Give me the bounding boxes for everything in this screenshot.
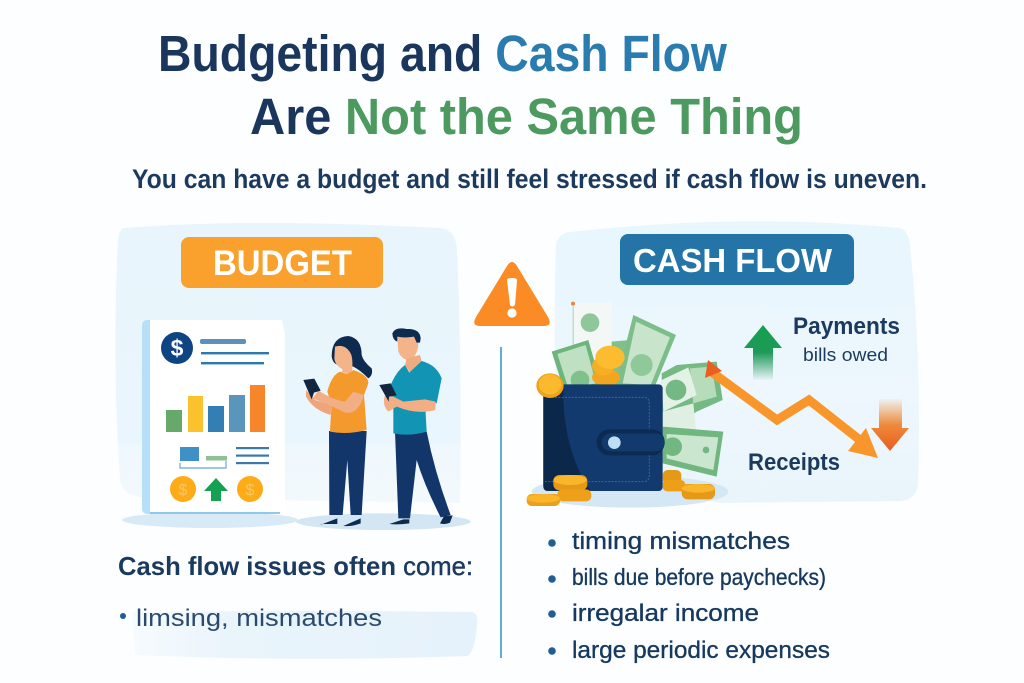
payments label: Payments bbox=[793, 313, 900, 340]
icon: coin bbox=[170, 476, 196, 502]
cash flow badge bbox=[620, 234, 854, 285]
icon: orange down arrow bbox=[871, 399, 909, 451]
title bbox=[158, 25, 803, 145]
panel background bbox=[555, 221, 919, 503]
receipts label: Receipts bbox=[748, 449, 840, 476]
bullet item: irregalar income bbox=[572, 600, 759, 627]
cash flow badge: CASH FLOW bbox=[633, 242, 833, 279]
coin bbox=[536, 373, 564, 398]
icon: dollar circle: $ bbox=[171, 335, 184, 361]
wallet bbox=[543, 384, 665, 491]
list: cash flow causes bbox=[548, 528, 830, 664]
man bbox=[379, 328, 453, 524]
illustration: two people with phones bbox=[296, 328, 471, 530]
text block: cash flow issues bbox=[118, 551, 477, 659]
title: Are Not the Same Thing bbox=[250, 88, 803, 145]
icon: coin: $ bbox=[179, 482, 188, 499]
icon: green up arrow bbox=[744, 325, 782, 380]
bar chart bbox=[166, 385, 265, 432]
coins in wallet bbox=[592, 346, 625, 386]
panel background bbox=[115, 223, 461, 503]
bullet item: large periodic expenses bbox=[572, 637, 830, 664]
subtitle: You can have a budget and still feel stressed if cash flow is uneven. bbox=[132, 164, 927, 194]
brush highlight bbox=[132, 611, 477, 659]
bills owed label: bills owed bbox=[803, 345, 888, 365]
icon: dollar circle bbox=[161, 332, 193, 364]
divider line bbox=[500, 347, 502, 658]
icon: coin bbox=[237, 476, 263, 502]
illustration: wallet with cash and coins bbox=[527, 302, 728, 508]
bullet text: limsing, mismatches bbox=[136, 605, 382, 632]
coin stacks bbox=[527, 470, 715, 506]
bullet bbox=[120, 613, 126, 619]
panel: cash flow bbox=[527, 221, 919, 508]
banknotes bbox=[552, 315, 723, 477]
icon: coin: $ bbox=[246, 482, 255, 499]
illustration: budget document bbox=[122, 320, 298, 528]
bullet item: bills due before paychecks) bbox=[572, 564, 826, 590]
panel: budget bbox=[115, 223, 471, 530]
icon: warning triangle bbox=[474, 262, 550, 326]
title: Budgeting and Cash Flow bbox=[158, 25, 727, 82]
icon: green up arrow bbox=[204, 478, 228, 501]
heading: Cash flow issues often come: bbox=[118, 551, 473, 581]
budget badge bbox=[181, 237, 383, 288]
woman bbox=[303, 336, 372, 526]
receipt bbox=[571, 302, 612, 363]
budget badge: BUDGET bbox=[213, 244, 352, 283]
bullet item: timing mismatches bbox=[572, 528, 790, 555]
trend arrow bbox=[705, 360, 878, 458]
